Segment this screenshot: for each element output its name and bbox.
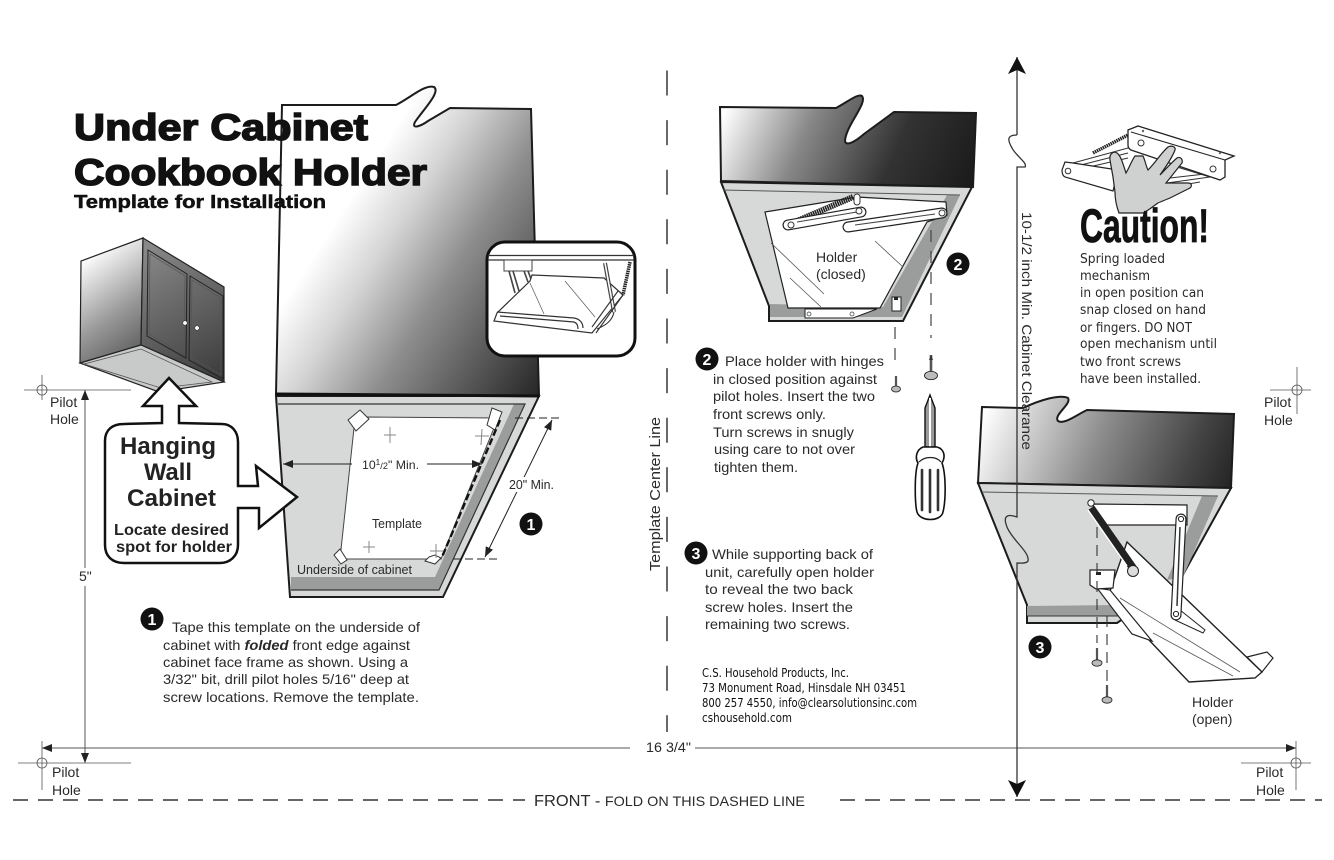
step 2 instructions: in closed position against: [713, 371, 877, 387]
step 3 instructions: While supporting back of: [712, 546, 873, 562]
dimension: 10 1/2 inch minimum: " Min.: [388, 458, 418, 472]
hand: [1110, 146, 1191, 213]
step 1 instructions: 1: [148, 612, 157, 629]
step 3 instructions: remaining two screws.: [705, 616, 850, 632]
badge 1 on illustration: [520, 512, 542, 536]
spring and link: [1088, 500, 1184, 617]
cabinet underside: [276, 394, 539, 597]
callout: hanging wall cabinet: Locate desired: [114, 522, 229, 539]
illustration: cabinet with template: [276, 87, 560, 597]
holder closed label: [816, 249, 866, 282]
icon: screwdriver: [915, 395, 945, 520]
pilot hole: bottom left: Hole: [52, 782, 81, 798]
holder body: [1090, 542, 1273, 682]
callout: hanging wall cabinet: [105, 378, 297, 563]
screw guides and screws: step 2: [892, 230, 938, 392]
step 2 instructions: using care to not over: [714, 441, 855, 457]
pilot hole: bottom left: [18, 741, 131, 798]
pilot hole: bottom right: Hole: [1256, 782, 1285, 798]
badge 3 on illustration: 3: [1036, 640, 1045, 657]
wall cabinet: [80, 238, 224, 392]
illustration: holder closed: [720, 95, 976, 321]
company contact details: C.S. Household Products, Inc.: [702, 666, 849, 680]
company contact details: 800 257 4550, info@clearsolutionsinc.com: [702, 696, 917, 710]
title: Under Cabinet: [74, 107, 368, 148]
step 3 instructions: unit, carefully open holder: [705, 564, 874, 580]
badge 3 on illustration: [1028, 636, 1052, 658]
dimension: 10-1/2 inch minimum cabinet clearance: [1005, 57, 1034, 797]
screw guides and screws: step 3: [1092, 527, 1112, 703]
cabinet front: [276, 87, 539, 396]
callout: hanging wall cabinet: Wall: [144, 459, 192, 486]
pilot hole: bottom right: [1241, 741, 1311, 798]
step 2 instructions: pilot holes. Insert the two: [713, 388, 875, 404]
badge 2 on illustration: 2: [954, 257, 963, 274]
caution text: Spring loaded: [1080, 252, 1165, 267]
step 3 instructions: 3: [692, 546, 701, 563]
underside: [721, 182, 972, 321]
step 2 instructions: Place holder with hinges: [725, 353, 884, 369]
cabinet front: [978, 397, 1234, 488]
dimension: 10 1/2 inch minimum: 10: [362, 458, 375, 472]
caution text: two front screws: [1080, 355, 1181, 370]
dimension: 5 inch: 5": [79, 568, 92, 584]
icon: hand on spring mechanism: [1062, 126, 1234, 213]
step 3 instructions: screw holes. Insert the: [705, 599, 853, 615]
holder open label: [1192, 694, 1234, 727]
fold line: FRONT - FOLD ON THIS DASHED LINE: [534, 793, 805, 810]
company contact details: [702, 666, 917, 725]
pilot hole: top left: [24, 375, 131, 427]
caution text: snap closed on hand: [1080, 303, 1206, 318]
underside label: Underside of cabinet: [297, 563, 413, 577]
pilot hole: top right: Hole: [1264, 412, 1293, 428]
step 2 instructions: 2: [703, 352, 712, 369]
caution text: or fingers. DO NOT: [1080, 321, 1192, 336]
caution text: open mechanism until: [1080, 337, 1217, 352]
template sheet: [334, 408, 502, 564]
step 2 instructions: front screws only.: [713, 406, 826, 422]
cabinet front: [720, 95, 976, 187]
holder open label: Holder: [1192, 694, 1234, 710]
template center line: Template Center Line: [648, 417, 664, 571]
illustration: holder open: [978, 397, 1273, 727]
dimension: 10 1/2 inch minimum: 1: [376, 458, 381, 467]
caution text: in open position can: [1080, 286, 1204, 301]
caution text: [1080, 252, 1217, 387]
caution text: mechanism: [1080, 269, 1150, 284]
step 1 instructions: [140, 608, 420, 705]
caution text: have been installed.: [1080, 372, 1201, 387]
caution heading: Caution!: [1080, 199, 1209, 252]
title: Template for Installation: [74, 192, 326, 212]
title: [74, 107, 427, 212]
pilot hole: bottom right: Pilot: [1256, 764, 1283, 780]
callout: hanging wall cabinet: Cabinet: [127, 485, 216, 512]
step 1 instructions: cabinet face frame as shown. Using a: [163, 654, 408, 670]
spring and arms: [788, 194, 945, 228]
step 1 instructions: cabinet with folded front edge against: [163, 637, 410, 653]
step 3 instructions: [684, 542, 874, 632]
company contact details: cshousehold.com: [702, 711, 792, 725]
inset: holder open detail: [487, 242, 635, 356]
step 2 instructions: tighten them.: [714, 459, 798, 475]
title: Cookbook Holder: [74, 152, 427, 193]
dimension: 20 inch minimum: [453, 418, 560, 559]
badge 1 on illustration: 1: [527, 517, 536, 534]
holder body: [765, 197, 947, 318]
pilot hole: top left: Hole: [50, 411, 79, 427]
step 2 instructions: [696, 348, 884, 475]
holder open label: (open): [1192, 711, 1232, 727]
callout: hanging wall cabinet: Hanging: [120, 433, 216, 460]
dimension: 5 inch: [76, 390, 94, 763]
step 2 instructions: Turn screws in snugly: [713, 424, 854, 440]
underside: [978, 483, 1231, 623]
pilot hole: top left: Pilot: [50, 394, 77, 410]
dimension: 10 1/2 inch minimum: [283, 458, 482, 472]
pilot hole: top right: Pilot: [1264, 394, 1291, 410]
step 3 instructions: to reveal the two back: [705, 581, 854, 597]
dimension: 10-1/2 inch minimum cabinet clearance: 10-1/2 inch Min. Cabinet Clearance: [1019, 212, 1034, 450]
back opening: [1092, 504, 1187, 525]
template label: Template: [372, 517, 422, 531]
dimension: 16 3/4 inch width: 16 3/4": [646, 740, 691, 755]
dimension: 20 inch minimum: 20" Min.: [509, 478, 554, 492]
company contact details: 73 Monument Road, Hinsdale NH 03451: [702, 681, 906, 695]
pilot hole: bottom left: Pilot: [52, 764, 79, 780]
pilot hole: top right: [1264, 367, 1311, 428]
badge 2 on illustration: [946, 252, 970, 276]
holder closed label: Holder: [816, 249, 858, 265]
spring arms: [1062, 135, 1210, 191]
step 1 instructions: 3/32" bit, drill pilot holes 5/16" deep at: [163, 671, 409, 687]
step 1 instructions: screw locations. Remove the template.: [163, 689, 419, 705]
callout: hanging wall cabinet: spot for holder: [116, 539, 232, 556]
holder closed label: (closed): [816, 266, 866, 282]
dimension: 10 1/2 inch minimum: /2: [380, 461, 388, 471]
top bracket: [1128, 126, 1234, 180]
step 1 instructions: Tape this template on the underside of: [172, 619, 420, 635]
